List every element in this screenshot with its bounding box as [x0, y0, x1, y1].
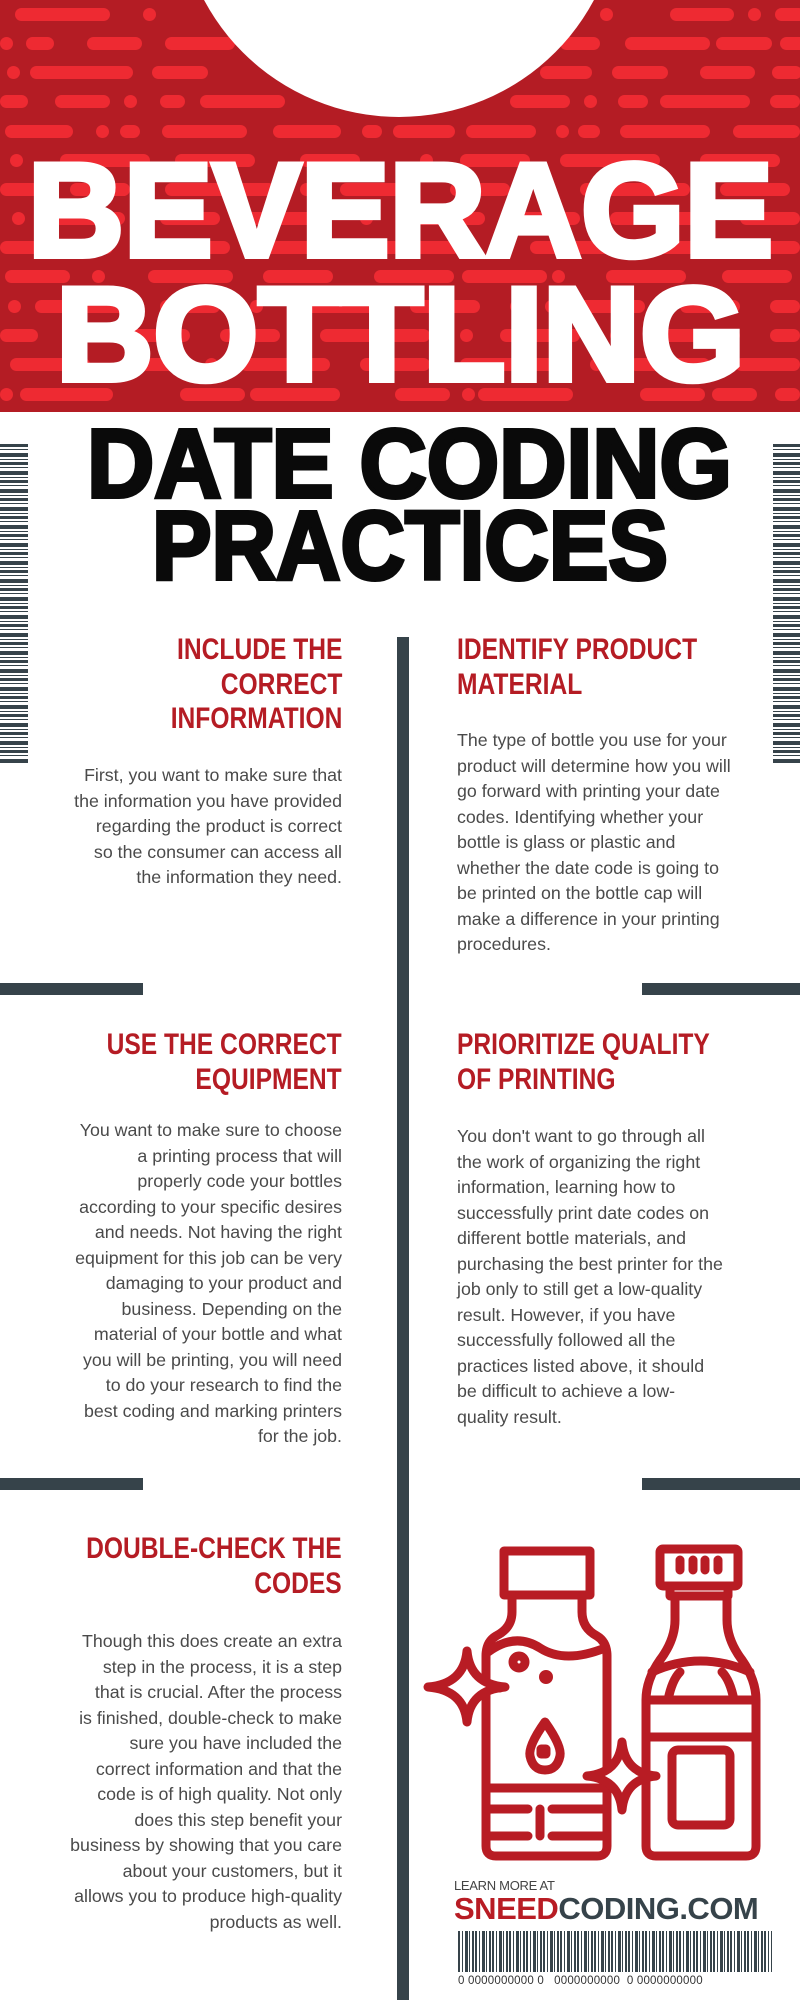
- text block: best coding and marking printers: [84, 1400, 342, 1420]
- text block: does this step benefit your: [134, 1810, 342, 1830]
- heading: DOUBLE-CHECK THE: [86, 1532, 342, 1565]
- text block: successfully print date codes on: [457, 1202, 709, 1222]
- text block: codes. Identifying whether your: [457, 806, 703, 826]
- heading: OF PRINTING: [457, 1062, 616, 1096]
- text block: procedures.: [457, 934, 551, 954]
- text block: business. Depending on the: [122, 1298, 342, 1318]
- heading: [107, 1028, 342, 1096]
- text block: [457, 730, 731, 954]
- text block: for the job.: [258, 1426, 342, 1446]
- text block: information, learning how to: [457, 1177, 675, 1197]
- callout: learn more at sneedcoding.com: SNEEDCODING.COM: [454, 1891, 758, 1926]
- text block: product will determine how you will: [457, 756, 731, 776]
- panel: include the correct information: [74, 633, 342, 887]
- text block: quality result.: [457, 1406, 562, 1426]
- text block: that is crucial. After the process: [95, 1682, 342, 1702]
- heading: EQUIPMENT: [196, 1062, 342, 1096]
- heading: MATERIAL: [457, 668, 582, 700]
- text block: successfully followed all the: [457, 1330, 675, 1350]
- text block: according to your specific desires: [79, 1196, 342, 1216]
- text block: and needs. Not having the right: [95, 1222, 342, 1242]
- text block: so the consumer can access all: [94, 842, 342, 862]
- text block: [74, 765, 342, 887]
- heading: PRIORITIZE QUALITY: [457, 1028, 710, 1061]
- text block: First, you want to make sure that: [84, 765, 342, 785]
- text block: products as well.: [210, 1912, 342, 1932]
- text block: the information you have provided: [74, 790, 342, 810]
- barcode: left edge: [0, 444, 28, 765]
- heading: IDENTIFY PRODUCT: [457, 633, 697, 666]
- heading: CORRECT: [220, 668, 342, 700]
- panel: double-check the codes: [70, 1532, 342, 1932]
- barcode: footer: [458, 1931, 772, 1987]
- text block: You don't want to go through all: [457, 1126, 705, 1146]
- text block: correct information and that the: [96, 1758, 342, 1778]
- text block: go forward with printing your date: [457, 781, 720, 801]
- text block: business by showing that you care: [70, 1835, 342, 1855]
- text block: job only to still get a low-quality: [457, 1279, 702, 1299]
- panel: use the correct equipment: [75, 1028, 342, 1446]
- heading: [86, 1532, 342, 1600]
- text block: damaging to your product and: [106, 1273, 342, 1293]
- heading: [170, 633, 342, 735]
- text block: is finished, double-check to make: [79, 1708, 342, 1728]
- text block: [70, 1631, 342, 1932]
- text block: bottle is glass or plastic and: [457, 832, 675, 852]
- text block: whether the date code is going to: [457, 858, 719, 878]
- text block: practices listed above, it should: [457, 1356, 704, 1376]
- barcode: right edge: [773, 444, 800, 765]
- text block: the information they need.: [136, 867, 342, 887]
- barcode: footer: 0 0000000000 0 0000000000 0 0000000000: [458, 1975, 703, 1987]
- text block: allows you to produce high-quality: [74, 1886, 342, 1906]
- text block: be difficult to achieve a low-: [457, 1381, 675, 1401]
- heading: [457, 633, 697, 700]
- panel: prioritize quality of printing: [456, 1028, 723, 1426]
- text block: [456, 1126, 723, 1426]
- heading: INFORMATION: [170, 702, 342, 735]
- center divider line: [397, 637, 409, 2000]
- text block: purchasing the best printer for the: [457, 1254, 723, 1274]
- text block: sure you have included the: [129, 1733, 342, 1753]
- text block: properly code your bottles: [137, 1171, 342, 1191]
- text block: code is of high quality. Not only: [97, 1784, 342, 1804]
- text block: different bottle materials, and: [457, 1228, 686, 1248]
- text block: be printed on the bottle cap will: [457, 883, 702, 903]
- heading: CODES: [255, 1566, 342, 1600]
- text block: [75, 1120, 342, 1446]
- sparkles: [428, 1651, 505, 1722]
- icon: bottles with sparkles: [424, 1544, 760, 1860]
- text block: step in the process, it is a step: [103, 1656, 342, 1676]
- text block: equipment for this job can be very: [75, 1248, 342, 1268]
- heading: INCLUDE THE: [177, 633, 342, 666]
- text block: the work of organizing the right: [457, 1152, 700, 1172]
- text block: about your customers, but it: [123, 1860, 342, 1880]
- text block: The type of bottle you use for your: [457, 730, 727, 750]
- panel: identify product material: [457, 633, 731, 954]
- text block: result. However, if you have: [457, 1304, 675, 1324]
- text block: a printing process that will: [137, 1146, 342, 1166]
- text block: regarding the product is correct: [96, 816, 342, 836]
- heading: USE THE CORRECT: [107, 1028, 342, 1061]
- subtitle: DATE CODING PRACTICES: [87, 420, 732, 590]
- heading: [457, 1028, 710, 1096]
- text block: make a difference in your printing: [457, 908, 720, 928]
- text block: material of your bottle and what: [94, 1324, 342, 1344]
- text block: you will be printing, you will need: [83, 1350, 342, 1370]
- right bottle: [646, 1549, 756, 1856]
- text block: to do your research to find the: [106, 1375, 342, 1395]
- left bottle: [486, 1551, 607, 1856]
- text block: Though this does create an extra: [82, 1631, 342, 1651]
- title: BEVERAGE BOTTLING: [28, 140, 773, 390]
- header: red banner: [0, 0, 800, 412]
- text block: You want to make sure to choose: [80, 1120, 342, 1140]
- title: BEVERAGE BOTTLING: BEVERAGE: [28, 140, 773, 285]
- callout: learn more at sneedcoding.com: LEARN MORE AT: [454, 1878, 555, 1893]
